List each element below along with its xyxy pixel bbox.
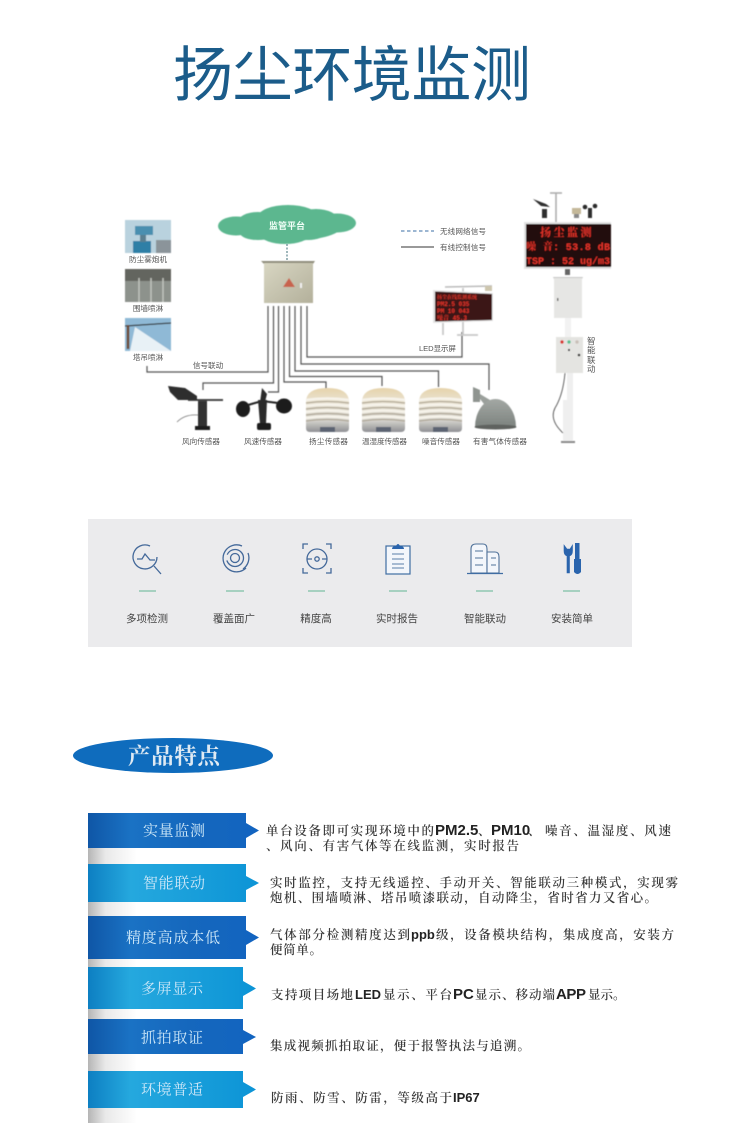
feature row: capture evidence (88, 1019, 530, 1054)
label: 精度高 (300, 612, 332, 625)
system diagram (125, 193, 611, 446)
legend (401, 226, 486, 252)
wind speed sensor (236, 388, 292, 430)
monitoring station pole (524, 193, 611, 442)
description: 便简单。 (270, 940, 322, 958)
small LED display: 扬尘在线监测系统 (437, 294, 478, 301)
description: 显示。 (588, 985, 626, 1003)
photo: tower crane spray (125, 318, 171, 351)
label: signal link: 信号联动 (193, 360, 224, 370)
description: 显示、平台 (383, 985, 452, 1003)
icon: easy installation (564, 543, 581, 574)
description: 炮机、围墙喷淋、塔吊喷漆联动，自动降尘，省时省力又省心。 (269, 888, 657, 906)
cloud: monitoring platform: 监管平台 (269, 220, 305, 231)
title: 扬尘环境监测 (173, 42, 531, 109)
dust sensor (306, 388, 349, 432)
label: smart link (587, 336, 596, 374)
feature row: high precision low cost: 精度高成本低 (126, 926, 220, 948)
legend: 无线网络信号 (440, 226, 486, 236)
panel: feature icons (88, 519, 632, 647)
small LED display: PM2.5 035 (437, 301, 470, 308)
small LED display: 噪音 45.3 (437, 314, 467, 322)
photo: wall spray (125, 269, 171, 302)
description: 防雨、防雪、防雷，等级高于 (271, 1088, 452, 1106)
icon: smart link (467, 544, 503, 574)
feature row: smart link: 智能联动 (143, 872, 205, 893)
monitoring station pole: 噪 音: 53.8 dB (526, 241, 610, 254)
label: smart link: 联 (587, 355, 596, 365)
description: IP67 (453, 1090, 480, 1105)
label: 有害气体传感器 (473, 436, 527, 446)
temperature humidity sensor (362, 388, 405, 432)
label: 实时报告 (376, 612, 418, 625)
label: smart link: 能 (587, 345, 596, 355)
label: 风速传感器 (244, 436, 282, 446)
description (269, 873, 678, 906)
label: 噪音传感器 (422, 436, 460, 446)
description: 显示、移动端 (475, 985, 555, 1003)
wireless link (286, 244, 288, 261)
description: 气体部分检测精度达到 (270, 925, 410, 943)
noise sensor (419, 388, 462, 432)
cloud: monitoring platform (218, 205, 356, 244)
icon: wide coverage (223, 545, 249, 572)
control cabinet (261, 261, 315, 303)
monitoring station pole: 扬尘监测 (540, 224, 594, 240)
feature row: smart link (88, 864, 678, 906)
dash (389, 590, 407, 592)
description: 、 (528, 821, 541, 839)
label: smart link: 动 (587, 364, 596, 374)
feature row: capture evidence: 抓拍取证 (141, 1026, 203, 1048)
description: PC (453, 986, 474, 1003)
description: APP (556, 986, 586, 1003)
description: 集成视频抓拍取证，便于报警执法与追溯。 (270, 1036, 530, 1054)
feature row: real monitoring (88, 813, 671, 854)
dash (226, 590, 244, 592)
feature row: multi-screen display: 多屏显示 (141, 978, 204, 998)
label: 扬尘传感器 (309, 436, 348, 446)
wiring (147, 306, 489, 392)
description: 噪音、温湿度、风速 (545, 821, 671, 839)
feature row: environment adaptable (88, 1071, 480, 1108)
label: 防尘雾炮机 (129, 254, 167, 264)
label: 覆盖面广 (213, 612, 255, 625)
dash (476, 590, 493, 592)
description: 单台设备即可实现环境中的 (266, 821, 434, 839)
feature row: real monitoring: 实量监测 (143, 820, 205, 840)
harmful gas sensor (473, 387, 516, 430)
description: PM10 (491, 822, 530, 839)
description: 级，设备模块结构，集成度高，安装方 (436, 925, 674, 943)
monitoring station pole: TSP : 52 ug/m3 (526, 256, 610, 268)
label: 围墙喷淋 (133, 303, 164, 313)
label: 安装简单 (551, 612, 593, 625)
description: 支持项目场地 (271, 985, 353, 1003)
description (266, 821, 671, 854)
label: 风向传感器 (182, 436, 220, 446)
description: 实时监控，支持无线遥控、手动开关、智能联动三种模式，实现雾 (270, 873, 678, 891)
shadow strips (88, 848, 158, 1123)
heading badge: product features (73, 738, 273, 773)
label: LED screen: LED显示屏 (419, 344, 456, 353)
label: 智能联动 (464, 612, 506, 625)
label: 塔吊喷淋 (133, 352, 164, 362)
small LED display: PM 10 043 (437, 308, 470, 315)
description (271, 985, 626, 1003)
label: 温湿度传感器 (362, 436, 407, 446)
description: LED (355, 987, 381, 1002)
small LED display (433, 286, 493, 335)
label: smart link: 智 (587, 336, 596, 346)
label: 多项检测 (126, 612, 168, 625)
icon: real-time report (386, 544, 410, 574)
icon: high precision (303, 544, 331, 573)
legend: 有线控制信号 (440, 242, 486, 252)
dash (139, 590, 156, 592)
wind vane sensor (168, 386, 223, 430)
heading badge: product features: 产品特点 (128, 739, 221, 771)
description: ppb (411, 927, 435, 942)
feature row: multi-screen display (88, 967, 626, 1009)
photo: dust fog cannon (125, 220, 171, 253)
description (270, 925, 674, 958)
description: PM2.5 (435, 822, 478, 839)
description: 、 (478, 821, 491, 839)
feature row: environment adaptable: 环境普适 (141, 1078, 203, 1100)
dash (563, 590, 580, 592)
icon: multi-item detection (133, 545, 161, 574)
feature row: high precision low cost (88, 916, 674, 959)
dash (308, 590, 325, 592)
description: 、风向、有害气体等在线监测，实时报告 (266, 836, 519, 854)
